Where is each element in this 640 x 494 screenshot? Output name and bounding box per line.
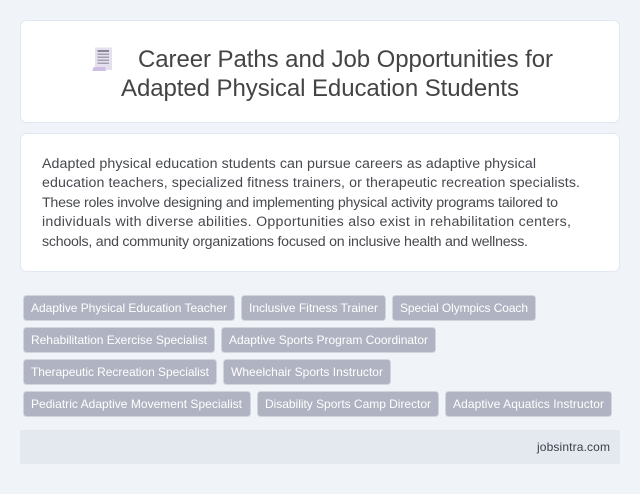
footer source text: jobsintra.com xyxy=(536,440,610,454)
tag: Pediatric Adaptive Movement Specialist xyxy=(24,392,250,416)
icon: scroll document xyxy=(92,48,112,71)
tag: Therapeutic Recreation Specialist: Therapeutic Recreation Specialist xyxy=(31,365,210,379)
tag: Adaptive Physical Education Teacher xyxy=(24,296,234,320)
tag: Adaptive Aquatics Instructor xyxy=(446,392,612,416)
panel: description card xyxy=(20,134,620,272)
text block: description: individuals with diverse abilities. Opportunities also exist in rehabilitation centers, xyxy=(42,214,571,230)
text block: description xyxy=(42,156,580,250)
tag: Adaptive Sports Program Coordinator: Adaptive Sports Program Coordinator xyxy=(229,333,428,347)
tag: Disability Sports Camp Director xyxy=(258,392,438,416)
tag: Special Olympics Coach xyxy=(392,296,536,320)
footer bar xyxy=(20,430,620,464)
tag: Wheelchair Sports Instructor: Wheelchair Sports Instructor xyxy=(231,365,383,379)
title: Career Paths and Job Opportunities for xyxy=(138,46,553,73)
text block: description: schools, and community organizations focused on inclusive health and wellness. xyxy=(42,234,528,250)
tag: Wheelchair Sports Instructor xyxy=(224,360,390,384)
text block: description: education teachers, specialized fitness trainers, or therapeutic recreation specialists. xyxy=(42,175,580,191)
tag: Adaptive Physical Education Teacher: Adaptive Physical Education Teacher xyxy=(31,301,227,315)
tag list xyxy=(24,296,612,416)
text block: description: Adapted physical education students can pursue careers as adaptive physical xyxy=(42,156,536,172)
tag: Pediatric Adaptive Movement Specialist: Pediatric Adaptive Movement Specialist xyxy=(31,397,243,411)
panel: title card xyxy=(20,20,620,122)
title xyxy=(121,46,553,102)
tag: Rehabilitation Exercise Specialist: Rehabilitation Exercise Specialist xyxy=(31,333,208,347)
tag: Inclusive Fitness Trainer xyxy=(242,296,386,320)
tag: Special Olympics Coach: Special Olympics Coach xyxy=(400,301,528,315)
tag: Disability Sports Camp Director: Disability Sports Camp Director xyxy=(265,397,431,411)
text block: description: These roles involve designing and implementing physical activity programs tailored to xyxy=(42,195,558,211)
tag: Inclusive Fitness Trainer: Inclusive Fitness Trainer xyxy=(249,301,378,315)
title: Adapted Physical Education Students xyxy=(121,75,519,102)
tag: Adaptive Sports Program Coordinator xyxy=(222,328,436,352)
tag: Adaptive Aquatics Instructor: Adaptive Aquatics Instructor xyxy=(453,397,604,411)
tag: Rehabilitation Exercise Specialist xyxy=(24,328,214,352)
tag: Therapeutic Recreation Specialist xyxy=(24,360,216,384)
